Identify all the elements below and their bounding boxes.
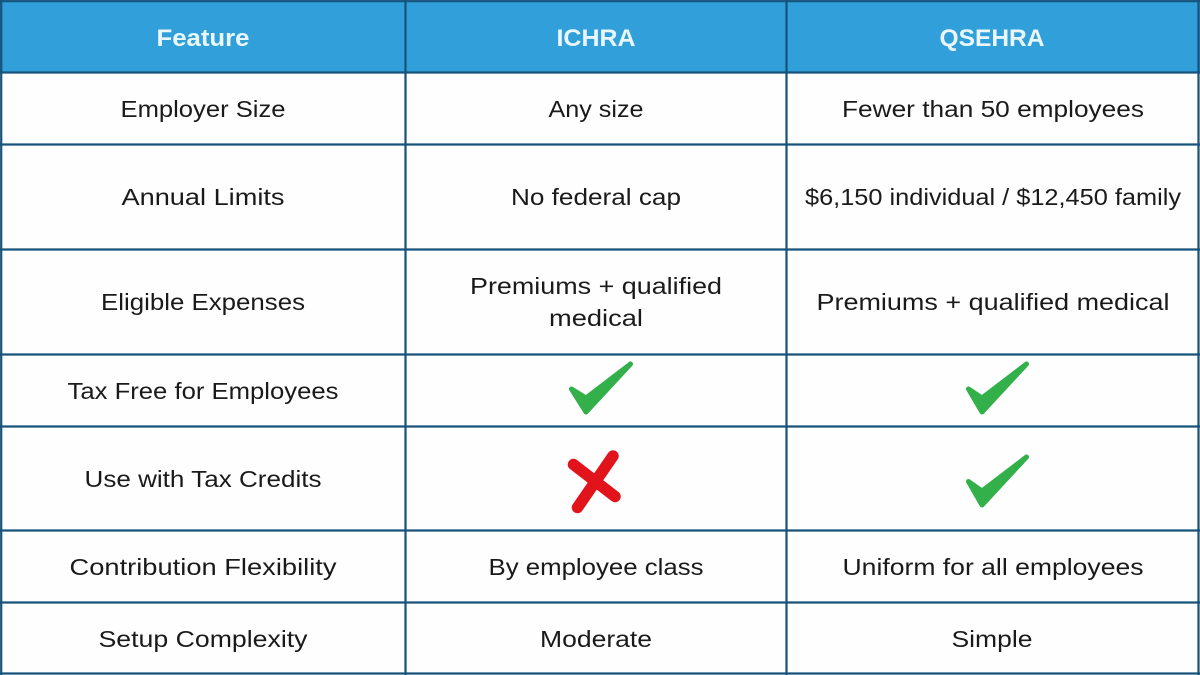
row: Annual Limits: Annual Limits xyxy=(122,184,284,210)
row: Annual Limits: No federal cap xyxy=(511,184,681,210)
row: Tax Free for Employees xyxy=(68,364,1026,412)
row: Tax Free for Employees: Tax Free for Employees xyxy=(68,378,338,404)
row: Contribution Flexibility: By employee class xyxy=(488,554,704,580)
row: Setup Complexity: Moderate xyxy=(540,626,652,652)
row: Setup Complexity: Setup Complexity xyxy=(98,626,308,652)
row: Employer Size: Any size xyxy=(548,96,644,122)
row: Use with Tax Credits xyxy=(84,456,1026,508)
heading: ICHRA: ICHRA xyxy=(556,25,636,52)
row: Eligible Expenses: Premiums + qualified medical xyxy=(816,289,1170,315)
row: Setup Complexity xyxy=(98,626,1032,652)
row: Annual Limits xyxy=(122,184,1182,210)
row: Eligible Expenses: Eligible Expenses xyxy=(101,289,305,315)
heading: Feature: Feature xyxy=(156,25,250,52)
row: Use with Tax Credits: Use with Tax Credits xyxy=(84,466,322,492)
row: Contribution Flexibility xyxy=(70,554,1144,580)
heading: QSEHRA: QSEHRA xyxy=(940,25,1044,52)
icon: QSEHRA check mark xyxy=(968,364,1026,412)
row: Eligible Expenses xyxy=(101,273,1170,331)
icon: ICHRA check mark xyxy=(572,364,630,412)
row: Contribution Flexibility: Uniform for all employees xyxy=(842,554,1144,580)
row: Eligible Expenses: Premiums + qualified xyxy=(470,273,722,299)
row: Employer Size: Employer Size xyxy=(120,96,286,122)
icon: QSEHRA check mark xyxy=(968,457,1026,505)
row: Employer Size xyxy=(120,96,1144,122)
row: Employer Size: Fewer than 50 employees xyxy=(842,96,1144,122)
row: Eligible Expenses: medical xyxy=(549,305,643,331)
header row xyxy=(0,0,1200,72)
row: Setup Complexity: Simple xyxy=(952,626,1032,652)
row: Contribution Flexibility: Contribution Flexibility xyxy=(70,554,337,580)
icon: ICHRA cross mark xyxy=(574,456,615,508)
row: Annual Limits: $6,150 individual / $12,450 family xyxy=(805,184,1182,210)
